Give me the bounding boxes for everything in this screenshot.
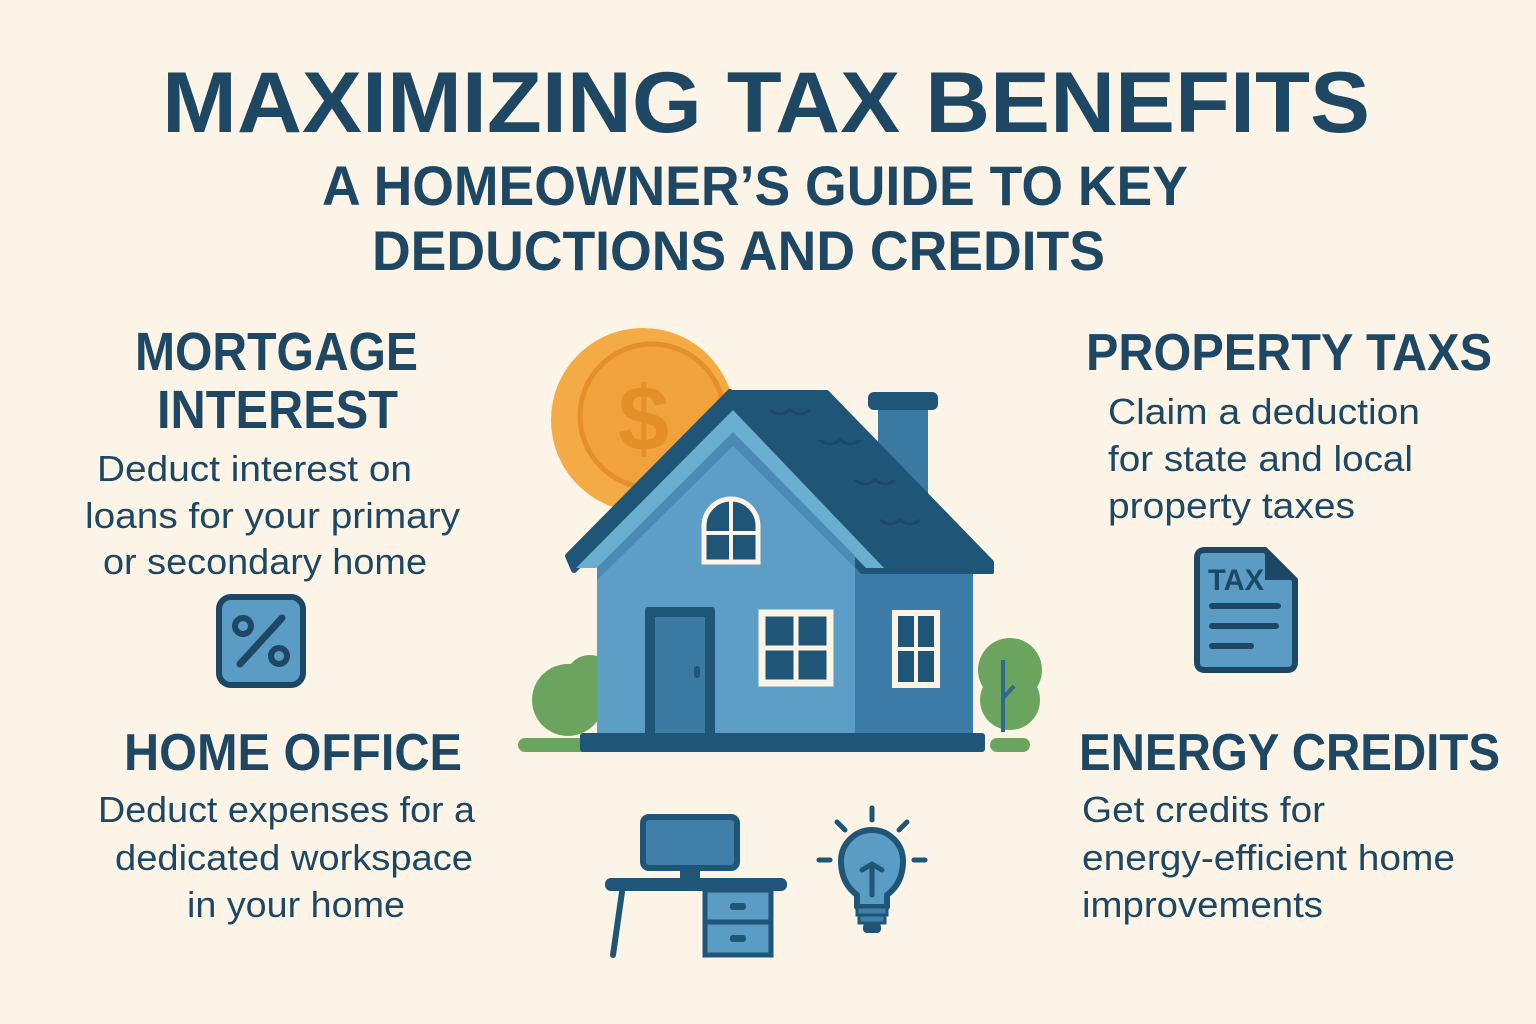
text: energy description: improvements — [1082, 884, 1323, 925]
icon: tax document: TAX — [1208, 564, 1264, 597]
text: home office description — [98, 789, 476, 925]
heading: energy credits: ENERGY CREDITS — [1079, 724, 1500, 782]
side wall — [853, 560, 973, 736]
shingles — [770, 410, 920, 524]
gable trim — [576, 410, 884, 568]
panel: mortgage interest — [85, 322, 460, 685]
text: property description — [1108, 391, 1420, 526]
text: property description: for state and local — [1108, 438, 1413, 479]
text: home office description: dedicated workspace — [115, 837, 473, 878]
front wall with gable — [597, 425, 855, 736]
text: home office description: Deduct expenses for a — [98, 789, 476, 830]
text: mortgage description: loans for your primary — [85, 495, 460, 536]
icon: tax document — [1197, 550, 1295, 670]
text: energy description: energy-efficient home — [1082, 837, 1455, 878]
roof left edge — [568, 392, 733, 570]
window front — [762, 613, 830, 683]
subtitle: A HOMEOWNER’S GUIDE TO KEY — [322, 154, 1188, 217]
heading: mortgage interest: MORTGAGE — [135, 322, 418, 382]
icon: light bulb — [819, 808, 925, 933]
text: mortgage description: Deduct interest on — [97, 448, 412, 489]
icon: desk with computer — [605, 817, 787, 955]
panel: energy credits — [1079, 724, 1500, 925]
heading: property taxs: PROPERTY TAXS — [1086, 324, 1492, 382]
base — [580, 733, 985, 752]
subtitle — [322, 154, 1188, 282]
heading: mortgage interest — [135, 322, 418, 440]
heading: mortgage interest: INTEREST — [157, 380, 398, 440]
panel: home office — [98, 724, 476, 925]
title: MAXIMIZING TAX BENEFITS — [162, 55, 1370, 151]
chimney — [878, 400, 928, 510]
text: property description: property taxes — [1108, 485, 1355, 526]
heading: home office: HOME OFFICE — [124, 724, 462, 782]
icon: coin: $ — [618, 368, 669, 470]
text: mortgage description: or secondary home — [103, 541, 427, 582]
roof right — [730, 392, 992, 572]
bushes — [518, 638, 1042, 752]
text: energy description: Get credits for — [1082, 789, 1325, 830]
subtitle: DEDUCTIONS AND CREDITS — [372, 219, 1105, 282]
text: property description: Claim a deduction — [1108, 391, 1420, 432]
icon: coin — [551, 328, 735, 512]
illustration: house with coin — [518, 328, 1042, 752]
panel: property taxes — [1086, 324, 1492, 670]
door — [645, 607, 715, 737]
arch window — [704, 499, 758, 562]
icon: percent — [219, 597, 303, 685]
text: home office description: in your home — [187, 884, 405, 925]
text: energy description — [1082, 789, 1455, 925]
text: mortgage description — [85, 448, 460, 582]
window side — [895, 613, 937, 685]
